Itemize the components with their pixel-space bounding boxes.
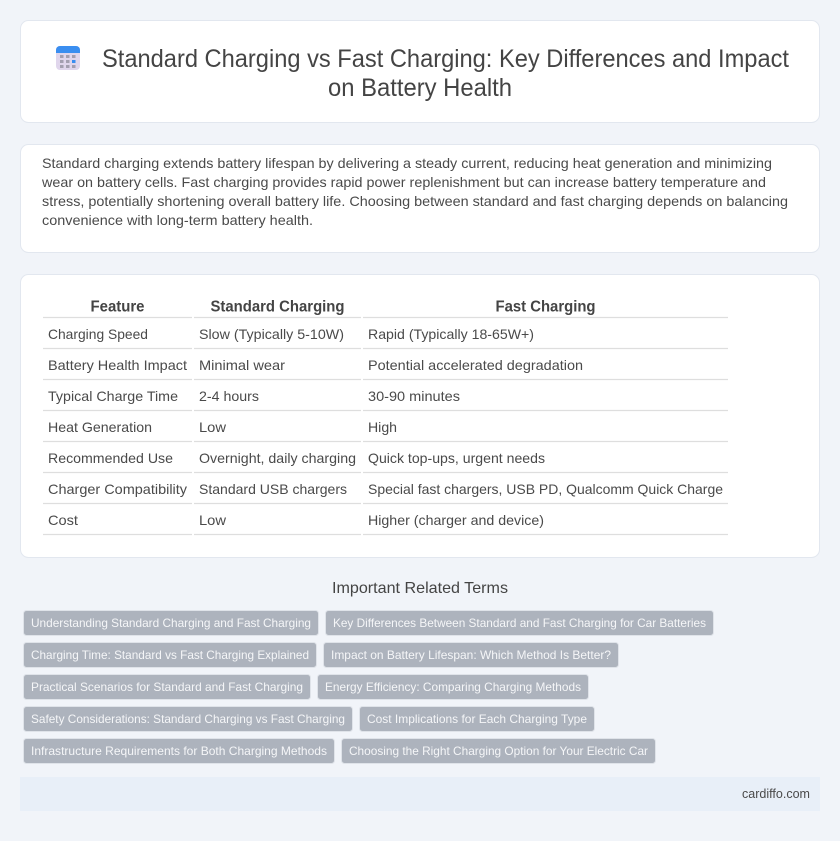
tag [342,738,656,764]
heading: important related terms: Important Related Terms [332,580,508,597]
table row: recommended use: Overnight, daily charging [199,450,356,466]
text block: introduction: convenience with long-term battery health. [42,212,313,228]
table row: charger compatibility [48,481,723,497]
title: Standard Charging vs Fast Charging: Key Differences and Impact [102,45,789,73]
tag [318,674,588,700]
table row: cost [48,512,544,528]
table row: typical charge time: 2-4 hours [199,388,259,404]
tag [24,738,334,764]
table row: heat generation [48,419,397,435]
tag [24,674,310,700]
text block: introduction: Standard charging extends battery lifespan by delivering a steady current, reducing heat generation and minimizing [42,155,772,171]
table row: cost: Higher (charger and device) [368,512,544,528]
panel: header [20,20,820,122]
table row: typical charge time: 30-90 minutes [368,388,460,404]
table row: typical charge time [48,388,460,404]
tag: Understanding Standard Charging and Fast Charging [31,616,311,630]
tag [24,642,316,668]
table header: Feature [90,298,145,316]
table row: cost: Low [199,512,227,528]
table row: heat generation: Heat Generation [48,419,152,435]
tag: Charging Time: Standard vs Fast Charging Explained [31,648,309,662]
table header: Standard Charging [210,298,344,316]
table row: charging speed [48,326,534,342]
title: on Battery Health [328,74,512,102]
table row: cost: Cost [48,512,78,528]
tag [24,706,352,732]
table row: recommended use: Quick top-ups, urgent needs [368,450,545,466]
table row: heat generation: High [368,419,397,435]
table header [90,298,596,316]
table row: typical charge time: Typical Charge Time [48,388,178,404]
tag: Cost Implications for Each Charging Type [367,712,587,726]
related terms tags [24,610,714,764]
tag: Impact on Battery Lifespan: Which Method Is Better? [331,648,611,662]
tag: Key Differences Between Standard and Fast Charging for Car Batteries [333,616,706,630]
tag [326,610,714,636]
table row: charging speed: Rapid (Typically 18-65W+) [368,326,534,342]
table row: battery health impact: Minimal wear [199,357,285,373]
icon: calendar grid [56,46,80,70]
table row: battery health impact: Potential accelerated degradation [368,357,583,373]
table row: charging speed: Slow (Typically 5-10W) [199,326,344,342]
table row: battery health impact [48,357,583,373]
footer [20,777,820,811]
table row: recommended use: Recommended Use [48,450,173,466]
tag [324,642,618,668]
tag [24,610,318,636]
text block: introduction: wear on battery cells. Fast charging provides rapid power replenishment but can increase battery temperature and [41,174,766,190]
table row: battery health impact: Battery Health Impact [48,357,187,373]
panel: introduction [20,144,820,252]
table row: charger compatibility: Charger Compatibility [48,481,187,497]
table row: charger compatibility: Standard USB chargers [199,481,347,497]
table row: charger compatibility: Special fast chargers, USB PD, Qualcomm Quick Charge [368,481,723,497]
table row: charging speed: Charging Speed [48,326,148,342]
tag: Choosing the Right Charging Option for Your Electric Car [349,744,648,758]
panel: comparison table [20,274,820,558]
table header: Fast Charging [496,298,596,316]
tag: Safety Considerations: Standard Charging vs Fast Charging [31,712,345,726]
tag: Energy Efficiency: Comparing Charging Methods [325,680,581,694]
tag: Infrastructure Requirements for Both Charging Methods [31,744,327,758]
table row: heat generation: Low [199,419,227,435]
tag: Practical Scenarios for Standard and Fast Charging [31,680,303,694]
text block: introduction: stress, potentially shortening overall battery life. Choosing between standard and fast charging depends on balancing [42,193,788,209]
tag [360,706,594,732]
table row: recommended use [48,450,545,466]
footer source text: cardiffo.com [742,787,810,801]
